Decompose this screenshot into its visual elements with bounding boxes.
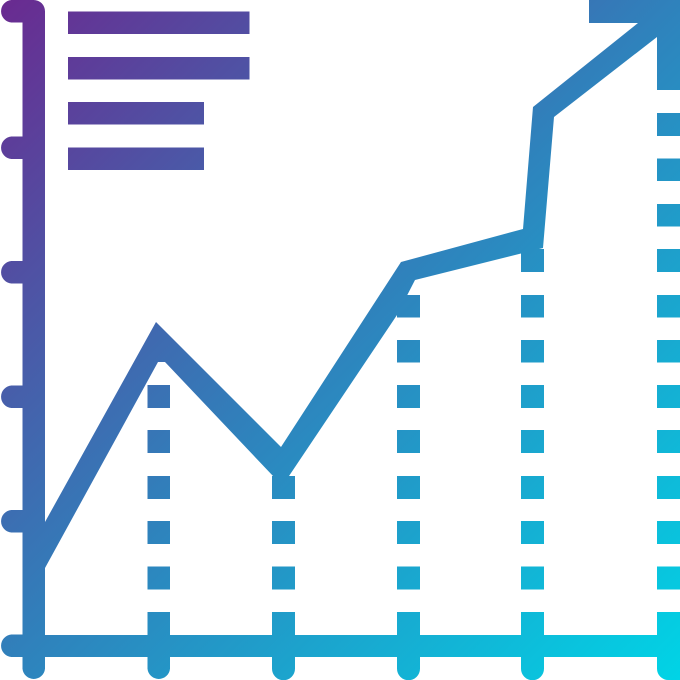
dashed drop line 1 [148,385,170,590]
legend text bars [68,12,250,170]
dashed drop line 4 [521,249,544,590]
dashed drop line 3 [397,295,420,590]
rising trend line with arrow [45,0,680,568]
dashed drop line 5 [657,113,680,590]
dashed drop line 2 [272,476,295,590]
